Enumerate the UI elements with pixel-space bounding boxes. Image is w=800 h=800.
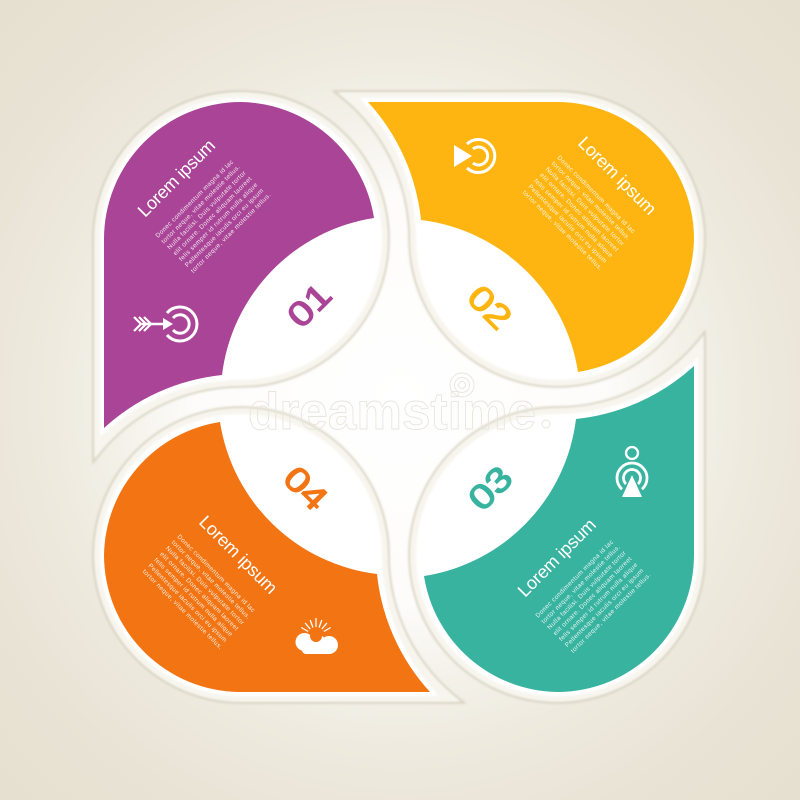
body text 01 — [154, 157, 273, 275]
teal segment — [424, 366, 694, 692]
body text 03: Pellentesque iaculis orci eu ipsum — [564, 567, 645, 649]
body text 01: tortor neque, vitae molestie tellus. — [160, 164, 242, 245]
yellow segment — [368, 102, 694, 372]
body text 01: tortor neque, vitae molestie tellus. — [190, 192, 273, 275]
drop 4 frame: orange bevel — [94, 408, 462, 702]
drop 3 frame: teal bevel — [410, 334, 704, 702]
panel: 01 purple — [104, 102, 374, 428]
body text 03: Nulla facilisi. Duis vulputate tortor — [546, 550, 628, 631]
body text 03: tortor neque, vitae molestie tellus. — [570, 572, 653, 655]
body text 01: elit ornare. Donec aliquam laoreet — [172, 176, 254, 257]
body text 03: felis semper id rutrum nulla alique — [558, 561, 640, 643]
body text 02: Donec condimentum magna id lac — [556, 154, 636, 235]
body text 01: Pellentesque iaculis orci eu ipsum — [184, 187, 265, 269]
panel: 04 orange — [104, 422, 430, 692]
body text 03: tortor neque, vitae molestie tellus. — [540, 544, 622, 625]
body text 02: tortor neque, vitae molestie tellus. — [550, 160, 631, 242]
body text 04: elit ornare. Donec aliquam laoreet — [158, 551, 240, 632]
icon: figure and target — [617, 447, 647, 497]
panel: 02 yellow — [368, 102, 694, 372]
number 01: 01 — [280, 276, 339, 335]
body text 04: Donec condimentum magna id lac — [176, 533, 256, 614]
icon: sun and cloud — [296, 618, 338, 654]
number 03: 03 — [461, 459, 520, 518]
heading 04: Lorem ipsum — [195, 512, 281, 598]
body text 04: Pellentesque iaculis orci eu ipsum — [147, 562, 228, 644]
body text 01: Donec condimentum magna id lac — [154, 159, 235, 239]
number 04: 04 — [276, 459, 335, 518]
body text 04 — [141, 533, 258, 651]
body text 03: Donec condimentum magna id lac — [534, 539, 615, 619]
body text 01: Nulla facilisi. Duis vulputate tortor — [166, 170, 248, 251]
heading 03: Lorem ipsum — [514, 515, 600, 601]
body text 02 — [521, 154, 638, 272]
drop 1 frame: purple bevel — [94, 92, 388, 460]
body text 02: tortor neque, vitae molestie tellus. — [521, 189, 604, 272]
body text 03: elit ornare. Donec aliquam laoreet — [552, 556, 634, 637]
body text 02: elit ornare. Donec aliquam laoreet — [538, 172, 620, 253]
body text 03 — [534, 537, 653, 655]
panel: 03 teal — [424, 366, 694, 692]
drop 2 frame: yellow bevel — [336, 92, 704, 386]
purple segment — [104, 102, 374, 428]
number 02: 02 — [460, 278, 519, 337]
heading 01: Lorem ipsum — [134, 135, 219, 221]
body text 04: tortor neque, vitae molestie tellus. — [170, 539, 251, 621]
body text 04: felis semper id rutrum nulla alique — [152, 557, 234, 638]
body text 04: Nulla facilisi. Duis vulputate tortor — [164, 545, 245, 626]
body text 01: felis semper id rutrum nulla alique — [178, 181, 260, 263]
icon: arrow and target — [134, 307, 197, 341]
body text 04: tortor neque, vitae molestie tellus. — [141, 568, 224, 651]
body text 02: Pellentesque iaculis orci eu ipsum — [527, 183, 608, 265]
icon: play and target — [454, 140, 495, 172]
body text 02: felis semper id rutrum nulla alique — [532, 178, 614, 259]
orange segment — [104, 422, 430, 692]
heading 02: Lorem ipsum — [574, 133, 660, 219]
watermark: dreamstime — [248, 383, 536, 441]
body text 02: Nulla facilisi. Duis vulputate tortor — [544, 166, 625, 247]
